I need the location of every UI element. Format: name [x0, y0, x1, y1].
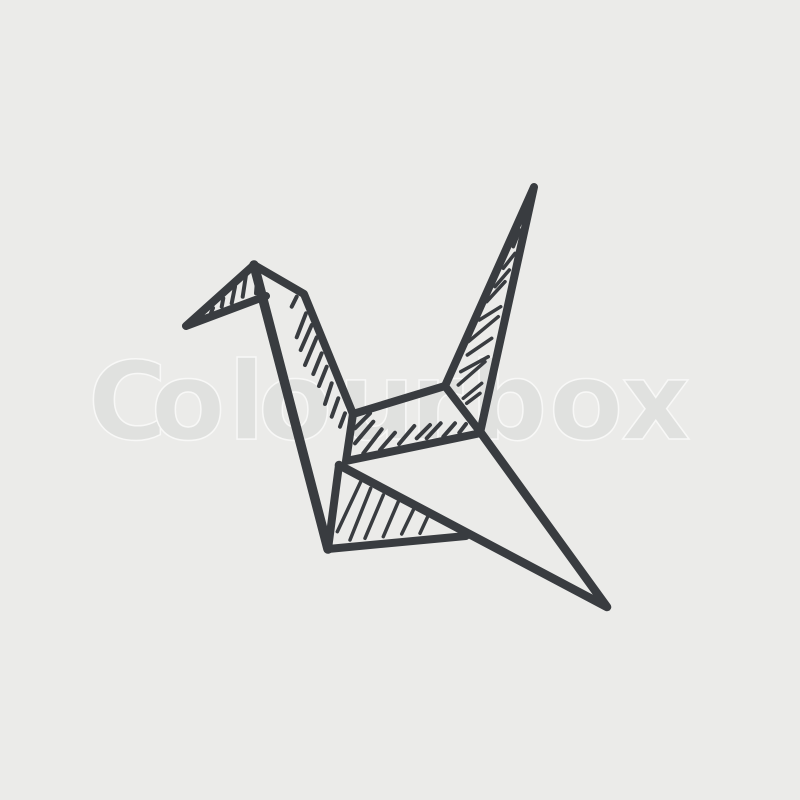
lower body hatching: [337, 482, 428, 540]
watermark: Colourbox: Colourbox: [88, 340, 691, 465]
wing hatching: [458, 230, 520, 403]
crane body upper panel: [346, 386, 481, 461]
crane neck front edge: [254, 265, 328, 549]
crane raised wing: [445, 187, 534, 433]
crane lower body: [328, 465, 466, 549]
head hatching: [211, 275, 257, 313]
crane tail wing: [339, 433, 607, 607]
neck hatching: [292, 297, 345, 427]
crane neck back edge: [254, 265, 353, 414]
icon: origami crane: [186, 187, 607, 607]
crane head and beak outline: [186, 265, 266, 326]
body hatching: [355, 413, 466, 453]
